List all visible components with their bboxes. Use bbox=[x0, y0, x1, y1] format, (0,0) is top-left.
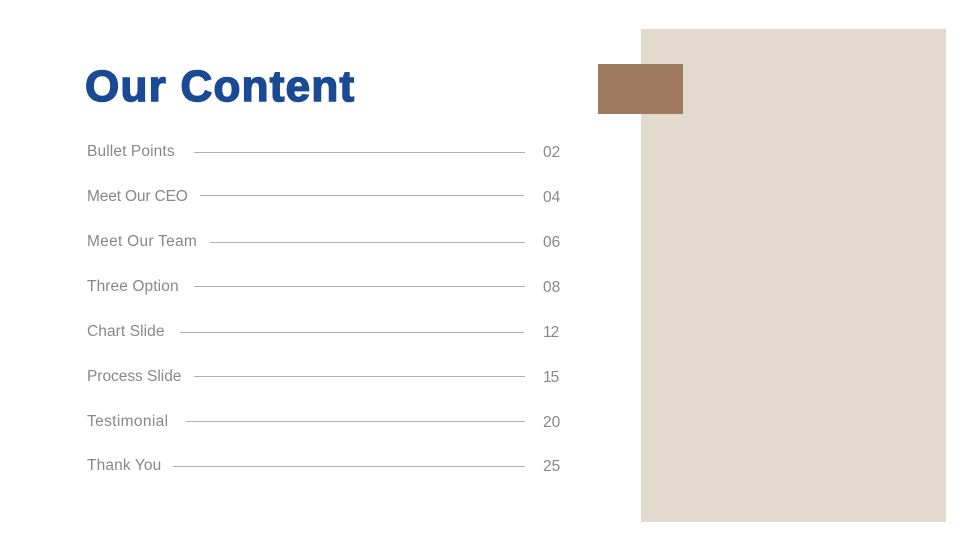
row: Three Option: 08 bbox=[543, 279, 560, 296]
title: Our Content bbox=[85, 62, 355, 111]
row: Process Slide: Process Slide bbox=[87, 368, 181, 385]
row: Bullet Points bbox=[87, 143, 560, 161]
row: Testimonial: 20 bbox=[543, 414, 560, 431]
row: Testimonial bbox=[87, 413, 560, 431]
row: Meet Our Team: Meet Our Team bbox=[87, 233, 197, 250]
row: Chart Slide: Chart Slide bbox=[87, 323, 165, 340]
row: Thank You bbox=[87, 457, 560, 475]
row: Meet Our Team: 06 bbox=[543, 234, 560, 251]
row: Process Slide: 15 bbox=[543, 369, 558, 386]
row: Testimonial: Testimonial bbox=[87, 413, 168, 430]
row: Process Slide bbox=[87, 368, 559, 386]
row: Three Option bbox=[87, 278, 560, 296]
beige panel bbox=[641, 29, 946, 522]
row: Thank You: 25 bbox=[543, 458, 560, 475]
brown rectangle bbox=[598, 64, 683, 114]
row: Chart Slide bbox=[87, 323, 558, 341]
row: Bullet Points: 02 bbox=[543, 144, 560, 161]
row: Meet Our Team bbox=[87, 233, 560, 251]
row: Bullet Points: Bullet Points bbox=[87, 143, 175, 160]
row: Three Option: Three Option bbox=[87, 278, 179, 295]
row: Meet Our CEO: Meet Our CEO bbox=[87, 188, 188, 205]
row: Meet Our CEO: 04 bbox=[543, 189, 560, 206]
row: Chart Slide: 12 bbox=[543, 324, 558, 341]
row: Thank You: Thank You bbox=[87, 457, 161, 474]
row: Meet Our CEO bbox=[87, 188, 560, 206]
